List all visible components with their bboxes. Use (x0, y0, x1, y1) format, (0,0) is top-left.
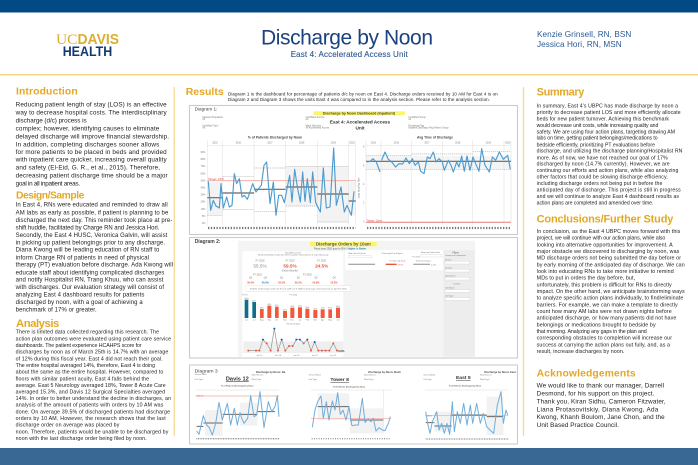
chart: average time of discharge: Target: 12pm (367, 218, 383, 222)
text block: design and sample: discharged by noon, with a goal of achieving a (16, 300, 143, 306)
panel: diagram 2 (190, 238, 518, 358)
logo: UC Davis Health: HEALTH (63, 44, 112, 59)
text block: introduction: Reducing patient length of stay (LOS) is an effective (16, 102, 167, 109)
text block: summary: action plans are completed and amended over time. (537, 200, 653, 206)
bar chart: monthly orders: Mar (314, 318, 317, 321)
bar chart: monthly orders: Oct (275, 318, 279, 321)
text block: conclusions: major obstacle we discovered to discharging by noon, was (537, 249, 680, 255)
text block: results intro (228, 92, 498, 102)
chart: percent of patients discharged by noon: 60% (201, 173, 205, 175)
dashboard: right controls (345, 250, 475, 357)
heading: Summary: Summary (537, 87, 585, 99)
diagram 1 header: Unit (355, 126, 365, 131)
panel: left column (15, 87, 173, 442)
dashboard: right controls: Unit Type (445, 294, 454, 297)
text block: conclusions: look into educating RNs to take more initiative to remind (537, 269, 674, 275)
panel: right column (537, 87, 685, 429)
text block: summary: and we will continue to analyze East 4 dashboard results as (537, 194, 679, 200)
dashboard: left card: 24.5% (315, 264, 329, 269)
text block: conclusions: unfortunately, this problem is difficult for RNs to directly (537, 282, 672, 288)
diagram 1 header: Unit/Ward Service (306, 116, 325, 119)
chart: Davis 12: Ward Service (252, 374, 264, 377)
text block: design and sample: with discharges. Our evaluation strategy will consist of (15, 285, 164, 291)
text block: analysis: noon with the last discharge order being filed by noon. (16, 436, 147, 442)
chart: percent of patients discharged by noon: Target: 18% (208, 177, 224, 181)
text block: introduction: discharge (d/c) process is (16, 118, 87, 125)
diagram 1 header: All (408, 118, 411, 121)
chart: percent of patients discharged by noon: 2015 (212, 143, 218, 145)
diagram 1 header: All Accelerated Access (306, 127, 330, 130)
text block: acknowledgements: We would like to thank our manager, Darrell (537, 383, 664, 390)
text block: introduction: goal in all inpatient areas. (16, 181, 80, 188)
bar chart: monthly orders: Apr (321, 318, 325, 321)
dashboard: right controls: 1,191 (431, 264, 436, 266)
chart: percent of patients discharged by noon: 70% (201, 166, 205, 168)
text block: results intro: Diagram 1 is the dashboard for percentage of patients d/c by noon on East 4. Discharge orders received by 10 AM for East 4 is on (228, 92, 498, 97)
diagram 1 header: Diagram 1: (195, 107, 217, 112)
dashboard: right controls: Discharged Top Subject (382, 252, 403, 255)
chart: percent of patients discharged by noon: 40% (201, 188, 205, 190)
dashboard: left card: Q2 (297, 277, 301, 279)
chart: average time of discharge: 6 (363, 165, 365, 167)
diagram 1 header (195, 107, 449, 131)
text block: conclusions: by early morning of the anticipated day of discharge. We can (537, 262, 685, 268)
chart: percent of patients discharged by noon: 2020 (349, 143, 355, 145)
diagram 1 header: All (202, 127, 205, 130)
diagram 1 header: Unit/Ward Type (202, 125, 219, 128)
bar chart: monthly orders: 42% (275, 305, 279, 307)
text block: summary: continuing our efforts and action plans, while also analyzing (537, 168, 678, 174)
chart: Tower 8: Ward Type (364, 378, 374, 381)
heading: Results: Results (186, 86, 224, 98)
text block: design and sample (15, 203, 173, 314)
text block: design and sample: and notify Hospitalist RN, Trang Khuu, who can assist (16, 278, 164, 284)
text block: conclusions: that morning. Analyzing any gaps in the plan and (537, 329, 647, 335)
text block: design and sample: inform Charge RN of patients in need of physical (16, 255, 149, 261)
bar chart: monthly orders: Nov (283, 319, 287, 321)
chart: average time of discharge: 2019 (486, 143, 492, 145)
dashboard: right controls: Department (445, 274, 456, 277)
bar chart: monthly orders: FY 19 (242, 295, 249, 297)
text block: introduction: complex; however, identifying causes to eliminate (16, 126, 160, 133)
chart: percent of patients discharged by noon (201, 136, 359, 228)
dashboard: left card: Q3 (249, 277, 253, 279)
text block: conclusions (537, 229, 685, 355)
dashboard: left card: Discharge Orders by 10am (316, 242, 371, 247)
chart: average time of discharge: 2020 (505, 143, 511, 145)
text block: analysis: orders by 10 AM. However, the research shows that the last (16, 416, 166, 422)
dashboard: left card: 55.0% (330, 281, 338, 284)
text block: design and sample: discharged the next day. This reminder took place at pre- (16, 218, 172, 224)
text block: analysis: averaged 15.3%, and Davis 12 Surgical Specialties averaged (16, 389, 165, 395)
chart: percent of patients discharged by noon: 50% (201, 180, 205, 182)
chart: percent of patients discharged by noon: 2018 (299, 143, 305, 145)
dashboard: left card: 59.5% (283, 264, 297, 269)
text block: conclusions: anticipated discharge, or how many patients did not have (537, 316, 676, 322)
diagram 2 label: Diagram 2: (195, 239, 221, 245)
chart: Tower 8: Tower 8 (330, 377, 349, 383)
text block: introduction: In addition, completing discharges sooner allows (16, 141, 159, 148)
chart: Tower 8 (309, 370, 401, 439)
chart: percent of patients discharged by noon: 2017 (267, 143, 273, 145)
text block: acknowledgements: Kwong, Khanh Boulom, Jane Chon, and the (537, 414, 665, 421)
line chart: recent 30 days (243, 323, 345, 357)
line chart: recent 30 days: Jun 18 (275, 355, 282, 357)
dashboard: left card: FY 2018 (256, 260, 265, 262)
text block: introduction: and safety (El-Eid, G. R., et al., 2015). Therefore, (16, 165, 160, 172)
text block: design and sample: educate staff about identifying complicated discharges (16, 270, 164, 276)
text block: conclusions: barriers. For example, we can make a template to directly (537, 302, 678, 308)
dashboard: left card: Q1 (280, 277, 284, 279)
chart: percent of patients discharged by noon: 10% (201, 209, 205, 211)
chart: average time of discharge: 8 (363, 147, 365, 149)
text block: conclusions: MD discharge orders not being submitted the day before or (537, 256, 681, 262)
dashboard: right controls: Service (445, 258, 453, 261)
dashboard: right controls: Filters (452, 251, 460, 254)
diagram 3 label: Diagram 3 (195, 368, 218, 374)
text block: design and sample: AM labs as early as possible, if patient is planning to be (16, 210, 169, 216)
bar chart: monthly orders: Aug (260, 318, 263, 321)
chart: East 5 (423, 370, 516, 439)
text block: summary: discharged by noon (14.7% currently). However, we are (537, 162, 670, 168)
bar chart: monthly orders (242, 295, 340, 321)
chart: percent of patients discharged by noon: 30% (201, 195, 205, 197)
title: Discharge by Noon (261, 26, 433, 50)
text block: summary: including discharge orders not being put in before the (537, 181, 662, 187)
chart: Tower 8: Service/Ward (309, 374, 321, 377)
text block: summary: more. As of now, we have not reached our goal of 17% (537, 155, 668, 161)
bar chart: monthly orders: 39% (336, 306, 340, 308)
diagram 1 header: Unit/Ward Group (408, 116, 426, 119)
heading: Conclusions/Further Study: Conclusions/Further Study (537, 213, 674, 225)
text block: analysis: floors with similar patient acuity, East 4 falls behind the (16, 376, 149, 382)
diagram 1 header: All (306, 118, 309, 121)
text block: summary: In summary, East 4's UBPC has made discharge by noon a (537, 103, 678, 109)
chart: Davis 12: Davis 12 (226, 376, 249, 382)
text block: summary: safety. We are using four action plans, targeting drawing AM (537, 129, 675, 135)
text block: results intro: Diagram 2 and Diagram 3 shows the units East 4 was compared to in the analysis section. Please refer to the analysis section. (228, 97, 490, 102)
logo: UC Davis Health: UC (56, 32, 78, 48)
dashboard: left card: Month-to-Monthly results after 65% of patients had evidence of orders/discharge (258, 254, 329, 257)
chart: average time of discharge: Avg Time of Discharge (417, 136, 453, 140)
text block: analysis: about the same as the entire hospital. However, compared to (16, 370, 163, 376)
line chart: recent 30 days: 0.0% (338, 349, 345, 353)
chart: East 5: Discharge by Noon: East (484, 370, 516, 374)
top banner (0, 0, 698, 12)
diagram 1 header: Discharge by Noon Dashboard (Inpatient) (323, 111, 396, 115)
text block: summary: would decrease unit costs, while increasing quality and (537, 123, 658, 129)
bar chart: monthly orders: Jan (298, 319, 302, 321)
chart: Davis 12: Unit Type (195, 378, 204, 381)
chart: Tower 8: Discharge by Noon: Bush (368, 370, 401, 374)
panel: results (186, 86, 517, 444)
dashboard: left card: Q3 (314, 277, 318, 279)
text block: acknowledgements: Liana Protasovitskiy, Diana Kwong, Ada (537, 406, 659, 413)
text block: analysis: The entire hospital averaged 14%, therefore, East 4 is doing (16, 363, 155, 369)
text block: conclusions: MDs to put in orders the day before, but, (537, 276, 635, 282)
chart: average time of discharge: 2016 (394, 143, 400, 145)
dashboard: right controls: Division (445, 267, 452, 269)
chart: Davis 12 (195, 370, 286, 439)
text block: design and sample: Secondly, the East 4 HUSC, Veronica Galvin, will assist (16, 233, 168, 239)
text block: introduction: decreasing patient discharge time should be a major (16, 173, 168, 180)
text block: conclusions: belongings or medications brought to bedside by (537, 322, 656, 328)
bar chart: monthly orders: 26% (283, 309, 287, 311)
bar chart: monthly orders: 30% (313, 308, 318, 310)
text block: conclusions: In conclusion, as the East 4 UBPC moves forward with this (537, 229, 681, 235)
text block: introduction (15, 102, 169, 188)
bar chart: monthly orders: Jul (253, 319, 256, 321)
chart: average time of discharge: 2018 (455, 143, 461, 145)
bar chart: monthly orders: May (328, 319, 332, 321)
text block: introduction: for more patients to be placed in beds and provided (16, 149, 167, 156)
logo: UC Davis Health: DAVIS (78, 32, 119, 48)
text block: analysis: 14%. In order to better understand the decline in discharges, an (16, 396, 171, 402)
dashboard: left card: Q4 (264, 277, 268, 279)
dashboard: left card: 36.0% (247, 281, 255, 284)
authors: Jessica Hori, RN, MSN (537, 40, 622, 49)
dashboard: left card (242, 242, 377, 357)
panel: diagram 1 (190, 106, 518, 234)
text block: introduction: way to decrease hospital costs. The interdisciplinary (15, 110, 167, 117)
dashboard: right controls: Note Unit of Patient (348, 252, 366, 255)
text block: design and sample: benchmark of 17% or greater. (16, 308, 97, 314)
text block: acknowledgements: Desmond, for his support on this project. (537, 391, 655, 398)
dashboard: right controls: % Orders by 10am (389, 260, 406, 263)
chart: percent of patients discharged by noon: 20% (201, 202, 205, 204)
bar chart: monthly orders: 60% (252, 300, 256, 302)
text block: conclusions: corresponding obstacles to completion will increase our (537, 336, 672, 342)
chart: average time of discharge: 4 (363, 184, 365, 186)
chart: average time of discharge: 0 (363, 222, 365, 224)
line chart: recent 30 days: Jun 20 (293, 355, 300, 357)
chart: East 5: East 5 (456, 375, 471, 381)
text block: summary: other factors that could be slowing discharge efficiency, (537, 175, 668, 181)
dashboard: left card: Q4 (332, 277, 336, 279)
chart: East 5: Ward Service (480, 374, 493, 377)
chart: percent of patients discharged by noon: 5% (202, 216, 205, 218)
diagram 1 header: East 4: Accelerated Access (330, 119, 391, 124)
dashboard: left card: FY 2019 (286, 260, 295, 262)
text block: introduction: delayed discharge will improve financial stewardship. (16, 133, 169, 140)
chart: percent of patients discharged by noon: 2019 (331, 143, 337, 145)
bar chart: monthly orders: Sep (268, 319, 272, 321)
dashboard: left card: Month/Fiscal Year (285, 251, 302, 254)
bar chart: monthly orders: FY 2020 (290, 295, 298, 297)
bar chart: monthly orders: 66% (245, 298, 249, 300)
line chart: recent 30 days: Recent 30 days (286, 323, 300, 326)
text block: summary: priority to decrease patient LOS and more efficiently allocate (537, 110, 681, 116)
text block: analysis: done. On average 39.5% of discharged patients had discharge (16, 409, 170, 415)
text block: analysis: dashboards. The patient experience HCAHPS score for (16, 343, 142, 349)
diagram 1 header: Selected Population (202, 116, 224, 119)
bar chart: monthly orders: 40% (298, 306, 302, 308)
chart: Davis 12: Ward Type (252, 378, 262, 381)
bar chart: monthly orders: 32% (321, 308, 325, 310)
text block: summary: beds for new patient turnover. Achieving this benchmark (537, 116, 669, 122)
bar chart: monthly orders: Jun (336, 319, 340, 321)
authors: Kenzie Grinsell, RN, BSN (537, 30, 631, 39)
chart: East 5: % of Patients Discharged by Noon (449, 385, 482, 388)
bar chart: monthly orders: 34% (260, 307, 264, 309)
text block: acknowledgements: Thank you, Kiran Sidhu, Cameron Fitzwater, (537, 398, 666, 405)
dashboard: left card: 63.5% (278, 281, 286, 284)
chart: average time of discharge: Avg Time (357, 177, 360, 187)
chart: average time of discharge (357, 136, 511, 228)
chart: Davis 12: Discharge by Noon: Da (256, 370, 286, 374)
chart: percent of patients discharged by noon: 80% (201, 159, 205, 161)
dashboard: right controls: Compare all Departments (445, 254, 466, 257)
text block: acknowledgements (537, 383, 666, 429)
text block: design and sample: Diana Kwong will be leading education of RN staff to (16, 248, 160, 254)
diagram 1 header: Discharge Flag (408, 125, 425, 128)
chart: East 5: Unit Type (423, 378, 433, 381)
dashboard: left card: 66.9% (262, 281, 270, 284)
dashboard: left card: 55.8% (312, 281, 320, 284)
chart: Tower 8: Unit Type (309, 378, 318, 381)
dashboard: right controls: Unit Era (453, 282, 461, 285)
text block: design and sample: therapy (PT) evaluation before discharge. Ada Kwong will (16, 263, 173, 269)
text block: analysis: of 12% during this fiscal year. East 4 did not reach their goal. (16, 356, 163, 362)
text block: conclusions: success at carrying the action plans out fully, and, as a (537, 342, 670, 348)
chart: percent of patients discharged by noon: % by Noon (357, 187, 359, 199)
dashboard: left card: 55.5% (253, 264, 267, 269)
text block: summary: discharge, and utilizing the discharge planning/Hospitalist RN (537, 149, 683, 155)
bar chart: monthly orders: Feb (306, 319, 310, 321)
text block: design and sample: in picking up patient belongings prior to any discharge. (16, 240, 165, 246)
text block: summary: bedside efficiently, prioritizing PT evaluations before (537, 142, 655, 148)
dashboard: left card: 59.2% (295, 281, 303, 284)
diagram 1 header: Ward Selection (306, 125, 322, 128)
bottom banner (0, 448, 698, 465)
dashboard: left card: FY 2019 (253, 275, 262, 277)
chart: Davis 12: 680.0% (197, 395, 204, 397)
dashboard: right controls: Total Discharged (416, 260, 430, 263)
text block: conclusions: count how many AM labs were not drawn nights before (537, 309, 672, 315)
dashboard: right controls: 39.5% (398, 264, 404, 266)
bar chart: monthly orders: 39% (290, 306, 295, 308)
text block: analysis: discharges by noon as of March 25th is 14.7% with an average (16, 350, 168, 356)
line chart: recent 30 days: Jun 15 (256, 355, 263, 357)
heading: Analysis: Analysis (16, 318, 59, 330)
heading: Design/Sample: Design/Sample (16, 190, 85, 201)
text block: design and sample: analyzing East 4 dashboard results for patients (16, 293, 144, 299)
text block: conclusions: to analyze specific action plans individually, to find/eliminate (537, 296, 683, 302)
chart: percent of patients discharged by noon: 90% (201, 152, 205, 154)
subtitle: East 4: Accelerated Access Unit (291, 50, 408, 59)
chart: Tower 8: % of Patients Discharged by Noon (333, 385, 366, 388)
chart: percent of patients discharged by noon: 2016 (236, 143, 242, 145)
text block: analysis (16, 330, 171, 442)
text block: introduction: with inpatient care quicker, increasing overall quality (15, 157, 167, 164)
text block: summary (537, 103, 683, 206)
text block: analysis: average. East 5 Neurology averaged 18%, Tower 8 Acute Care (16, 383, 166, 389)
chart: Tower 8: Ward Service (364, 374, 377, 377)
text block: analysis: analysis of the amount of patients with orders by 10 AM was (16, 403, 164, 409)
dashboard: right controls: Minimum Patient Vols (421, 251, 440, 254)
diagram 1 header: All (202, 118, 205, 121)
dashboard: left card: FY 2020 (317, 260, 327, 262)
line chart: recent 30 days: Jun 22 (312, 355, 318, 357)
text block: analysis: discharge order on average was placed by (16, 423, 120, 429)
heading: Acknowledgements: Acknowledgements (537, 369, 636, 380)
chart: percent of patients discharged by noon: 0% (202, 223, 205, 225)
bar chart: monthly orders: 35% (305, 307, 310, 309)
bar chart: monthly orders: 32% (328, 308, 332, 310)
text block: summary: labs on time, getting patient belongings/medications to (537, 136, 658, 142)
text block: analysis: There is limited data collected regarding this research. The (16, 330, 159, 336)
line chart: recent 30 days: Jun 25 (330, 355, 337, 357)
bar chart: monthly orders: 46% (267, 304, 272, 306)
logo: UC Davis Health (56, 32, 119, 59)
text block: design and sample: shift huddle, facilitated by Charge RN and Jessica Hori. (16, 226, 160, 232)
dashboard: right controls: FY 2020 (412, 257, 421, 259)
chart: East 5: 680% (427, 415, 432, 417)
bar chart: monthly orders: Dec (291, 319, 294, 321)
chart: Davis 12: Service/Ward (195, 373, 207, 376)
dashboard: left card: FY 2020 (303, 275, 312, 277)
dashboard: right controls: Unit Name (445, 286, 455, 289)
panel: diagram 3 (190, 365, 518, 444)
text block: conclusions: result, increase discharges by noon. (537, 349, 624, 355)
diagram 1 header: Inpatient Discharge Flag Patient Group (408, 127, 449, 130)
dashboard: left card: Fiscal year 2020 goal is 65% / Higher is Better (314, 247, 366, 250)
text block: analysis: noon. Therefore, patients would be unable to be discharged by (16, 429, 169, 435)
chart: average time of discharge: 2015 (371, 143, 377, 145)
chart: percent of patients discharged by noon: % of Patients Discharged by Noon (248, 136, 302, 140)
text block: conclusions: looking into alternative opportunities for improvement. A (537, 242, 673, 248)
chart: East 5: Ward Type (480, 378, 490, 381)
authors (537, 30, 631, 49)
chart: Davis 12: % of Patients Discharged by Noon (221, 385, 254, 388)
text block: summary: anticipated day of discharge. This project is still in progress (537, 188, 681, 194)
chart: average time of discharge: 2017 (424, 143, 430, 145)
text block: conclusions: project, we will continue with our action plans, while also (537, 236, 665, 242)
dashboard: left card: 39.46% of discharge orders for East 4 (138 out of 168) for discharge orders by 10am to 4pm FY 2020 (250, 287, 347, 290)
dashboard: right controls: 2020 (349, 256, 354, 258)
heading: Introduction: Introduction (16, 87, 78, 98)
bar chart: monthly orders: Jun (245, 319, 248, 321)
chart: East 5: Service/Ward (423, 374, 435, 377)
text block: conclusions: impact. On the other hand, we anticipate brainstorming ways (537, 289, 685, 295)
dashboard: left card: Recent Months (282, 270, 299, 273)
text block: design and sample: In East 4, RNs were educated and reminded to draw all (16, 203, 168, 209)
text block: acknowledgements: Unit Based Practice Council. (537, 422, 619, 429)
chart: average time of discharge: 2 (363, 203, 365, 205)
dashboard background (238, 241, 475, 357)
text block: analysis: action plan outcomes were evaluated using patient care service (16, 336, 171, 342)
